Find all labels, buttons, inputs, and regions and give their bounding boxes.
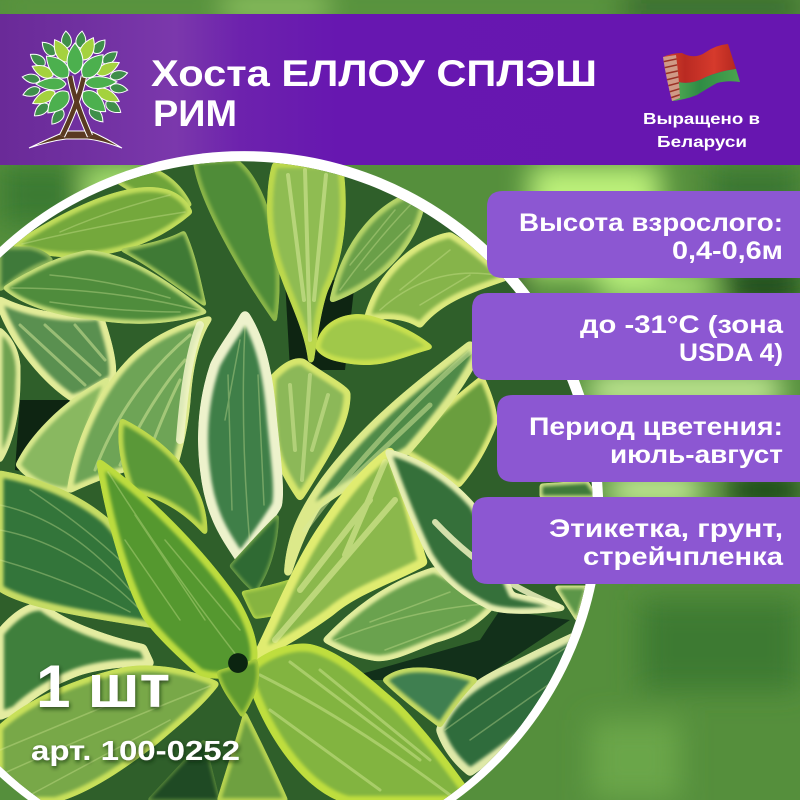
panel: flowering period	[497, 395, 800, 482]
logo: tree	[21, 31, 129, 148]
header band	[0, 14, 800, 165]
panel: package contents	[472, 497, 800, 584]
panel: package contents: Этикетка, грунт,	[549, 515, 783, 543]
panel: package contents: стрейчпленка	[583, 543, 784, 571]
panel: flowering period: Период цветения:	[529, 413, 783, 441]
caption: grown in Belarus: Выращено в	[643, 111, 760, 128]
icon: Belarus flag	[662, 44, 740, 101]
quantity: 1 шт	[36, 653, 170, 720]
title	[151, 53, 597, 134]
title: РИМ	[153, 93, 237, 134]
panel: adult height: 0,4-0,6м	[672, 237, 783, 265]
panel: hardiness: USDA 4)	[679, 339, 783, 367]
panel: flowering period: июль-август	[610, 441, 783, 469]
panel: adult height: Высота взрослого:	[519, 209, 783, 237]
article number: арт. 100-0252	[31, 735, 240, 766]
panel: hardiness	[472, 293, 800, 380]
title: Хоста ЕЛЛОУ СПЛЭШ	[151, 53, 597, 94]
caption: grown in Belarus: Беларуси	[657, 134, 747, 151]
panel: hardiness: до -31°C (зона	[580, 311, 784, 339]
panel: adult height	[487, 191, 800, 278]
plant photo in white circle	[0, 150, 610, 800]
caption: grown in Belarus	[643, 111, 760, 151]
